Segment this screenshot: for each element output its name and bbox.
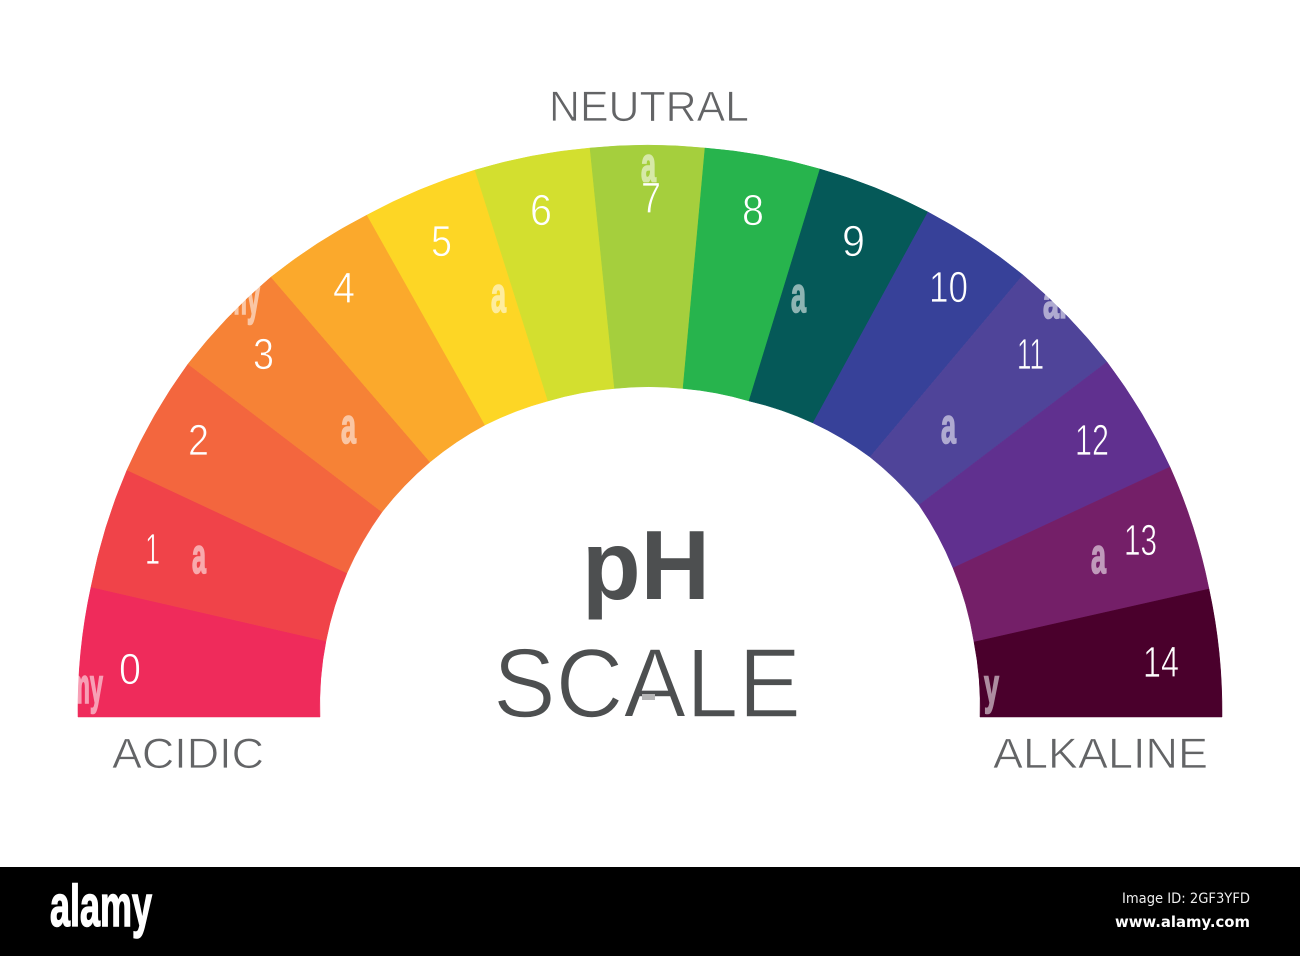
watermark marks over gauge: al (1043, 273, 1067, 329)
scale numbers 0 to 14: 6 (530, 186, 552, 235)
scale numbers 0 to 14: 13 (1124, 516, 1157, 565)
heading: alkaline label: ALKALINE (993, 730, 1208, 778)
segment 2 (127, 364, 382, 573)
scale numbers 0 to 14: 7 (641, 174, 661, 223)
footer logo: alamy (50, 874, 152, 939)
watermark marks over gauge: y (984, 658, 999, 714)
scale numbers 0 to 14: 8 (742, 186, 764, 235)
segment 1 (91, 470, 347, 641)
watermark marks over gauge: a (941, 398, 957, 454)
watermark marks over gauge: a (641, 137, 657, 193)
watermark marks over gauge: a (791, 267, 807, 323)
heading: acidic label: ACIDIC (112, 730, 264, 778)
segment 12 (919, 362, 1170, 568)
segment 14 (974, 589, 1222, 717)
watermark marks over gauge: my (226, 269, 260, 325)
segment 9 (749, 169, 928, 423)
watermark marks over gauge: a (1091, 528, 1107, 584)
segment 10 (813, 212, 1023, 457)
watermark marks over gauge: a (192, 528, 207, 584)
scale numbers 0 to 14 (119, 174, 1179, 694)
center title: pH SCALE: pH (582, 510, 710, 620)
scale numbers 0 to 14: 12 (1075, 416, 1109, 465)
watermark marks over gauge: a (491, 267, 507, 323)
segment 11 (870, 275, 1107, 505)
segment 8 (683, 148, 820, 401)
site address: www.alamy.com (1115, 913, 1250, 931)
scale numbers 0 to 14: 2 (188, 416, 209, 465)
scale numbers 0 to 14: 5 (431, 217, 452, 266)
scale numbers 0 to 14: 0 (119, 645, 141, 694)
scale numbers 0 to 14: 14 (1143, 638, 1179, 687)
scale numbers 0 to 14: 10 (929, 263, 968, 312)
scale numbers 0 to 14: 4 (333, 264, 355, 313)
segment 7 (590, 145, 705, 388)
center title: pH SCALE: SCALE (493, 628, 801, 738)
watermark marks over gauge (69, 137, 1107, 714)
segment 13 (953, 467, 1209, 642)
scale numbers 0 to 14: 3 (253, 330, 274, 379)
image id: Image ID: 2GF3YFD (1122, 891, 1250, 907)
segment 6 (475, 148, 614, 401)
scale numbers 0 to 14: 1 (145, 525, 160, 574)
segment 0 (78, 587, 326, 717)
segment 3 (188, 277, 430, 512)
segment 4 (271, 215, 485, 462)
scale numbers 0 to 14: 9 (842, 217, 865, 266)
watermark marks over gauge: a (341, 398, 357, 454)
center title: pH SCALE (493, 510, 801, 738)
segment 5 (367, 170, 548, 425)
scale numbers 0 to 14: 11 (1017, 330, 1044, 379)
heading: neutral label: NEUTRAL (549, 83, 749, 131)
watermark marks over gauge: my (69, 658, 103, 714)
footer bar (0, 867, 1300, 956)
pH scale semicircle gauge (78, 145, 1222, 717)
